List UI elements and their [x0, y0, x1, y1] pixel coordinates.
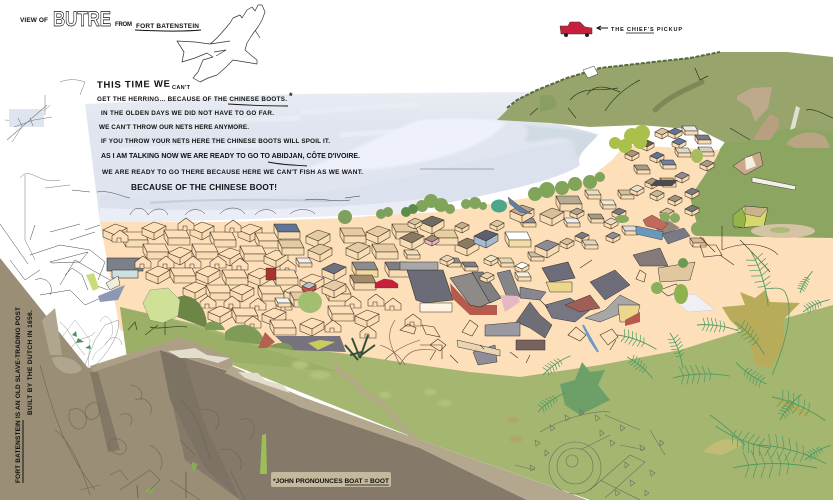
footnote: *JOHN PRONOUNCES BOAT = BOOT	[273, 478, 389, 485]
hill bare patches and tree line	[507, 52, 833, 148]
icon: bird	[177, 5, 265, 82]
text: quotation: CAN'T	[172, 85, 191, 91]
scattered huts on the sand	[400, 240, 770, 363]
sketched left side	[0, 80, 315, 368]
house with red roof	[636, 226, 664, 240]
text: fort note: BUILT BY THE DUTCH IN 1656.	[27, 310, 34, 415]
village: dense roofs	[400, 126, 770, 365]
text: title: BUTRE	[53, 8, 111, 31]
water patch at left	[9, 109, 44, 127]
icon: red pickup	[560, 22, 592, 37]
text: quotation: BECAUSE OF THE CHINESE BOOT!	[131, 182, 277, 192]
sand	[100, 145, 833, 400]
house with star flag	[266, 268, 276, 280]
text: quotation	[97, 79, 363, 192]
plants on the wall edge	[60, 320, 122, 368]
text: quotation: THIS TIME WE	[97, 79, 170, 91]
fort	[0, 258, 587, 500]
text: title: FORT BATENSTEIN	[136, 23, 199, 30]
hill hut cluster and boat	[700, 152, 815, 255]
text: quotation: GET THE HERRING... BECAUSE OF THE CHINESE BOOTS.	[97, 96, 287, 103]
village: tan houses in centre	[274, 224, 418, 307]
arrow and pickup label: THE CHIEF'S PICKUP	[611, 27, 682, 33]
sea	[85, 92, 615, 224]
twig on water patch	[7, 105, 52, 140]
small colored houses at left edge	[86, 258, 143, 302]
dense clusters	[400, 232, 424, 250]
village: line-drawn houses	[103, 218, 421, 338]
hill	[497, 52, 833, 240]
dirt path and grass patches	[292, 361, 523, 443]
footnote	[271, 472, 391, 487]
text: title	[20, 8, 201, 31]
text: quotation: IF YOU THROW YOUR NETS HERE THE CHINESE BOOTS WILL SPOIL IT.	[101, 138, 330, 145]
text: fort note: FORT BATENSTEIN IS AN OLD SLAVE-TRADING POST	[15, 307, 22, 483]
text: quotation: WE ARE READY TO GO THERE BECAUSE HERE WE CAN'T FISH AS WE WANT.	[102, 169, 363, 176]
palm plants	[534, 246, 832, 478]
trees	[338, 125, 715, 304]
text: title: FROM	[115, 22, 132, 28]
text: quotation: *	[289, 91, 293, 101]
red car in the village	[375, 279, 398, 288]
text: fort note	[15, 307, 34, 483]
text: title: VIEW OF	[20, 17, 48, 24]
text: quotation: AS I AM TALKING NOW WE ARE READY TO GO TO ABIDJAN, CÔTE D'IVOIRE.	[101, 151, 360, 160]
foreground bushes and tree	[128, 288, 435, 365]
text: quotation: IN THE OLDEN DAYS WE DID NOT HAVE TO GO FAR.	[101, 110, 274, 117]
text: quotation: WE CAN'T THROW OUR NETS HERE ANYMORE.	[99, 124, 249, 131]
grass	[120, 305, 833, 500]
hill foreground slope	[690, 128, 833, 240]
ground sketch: overgrown ruin	[515, 410, 665, 500]
